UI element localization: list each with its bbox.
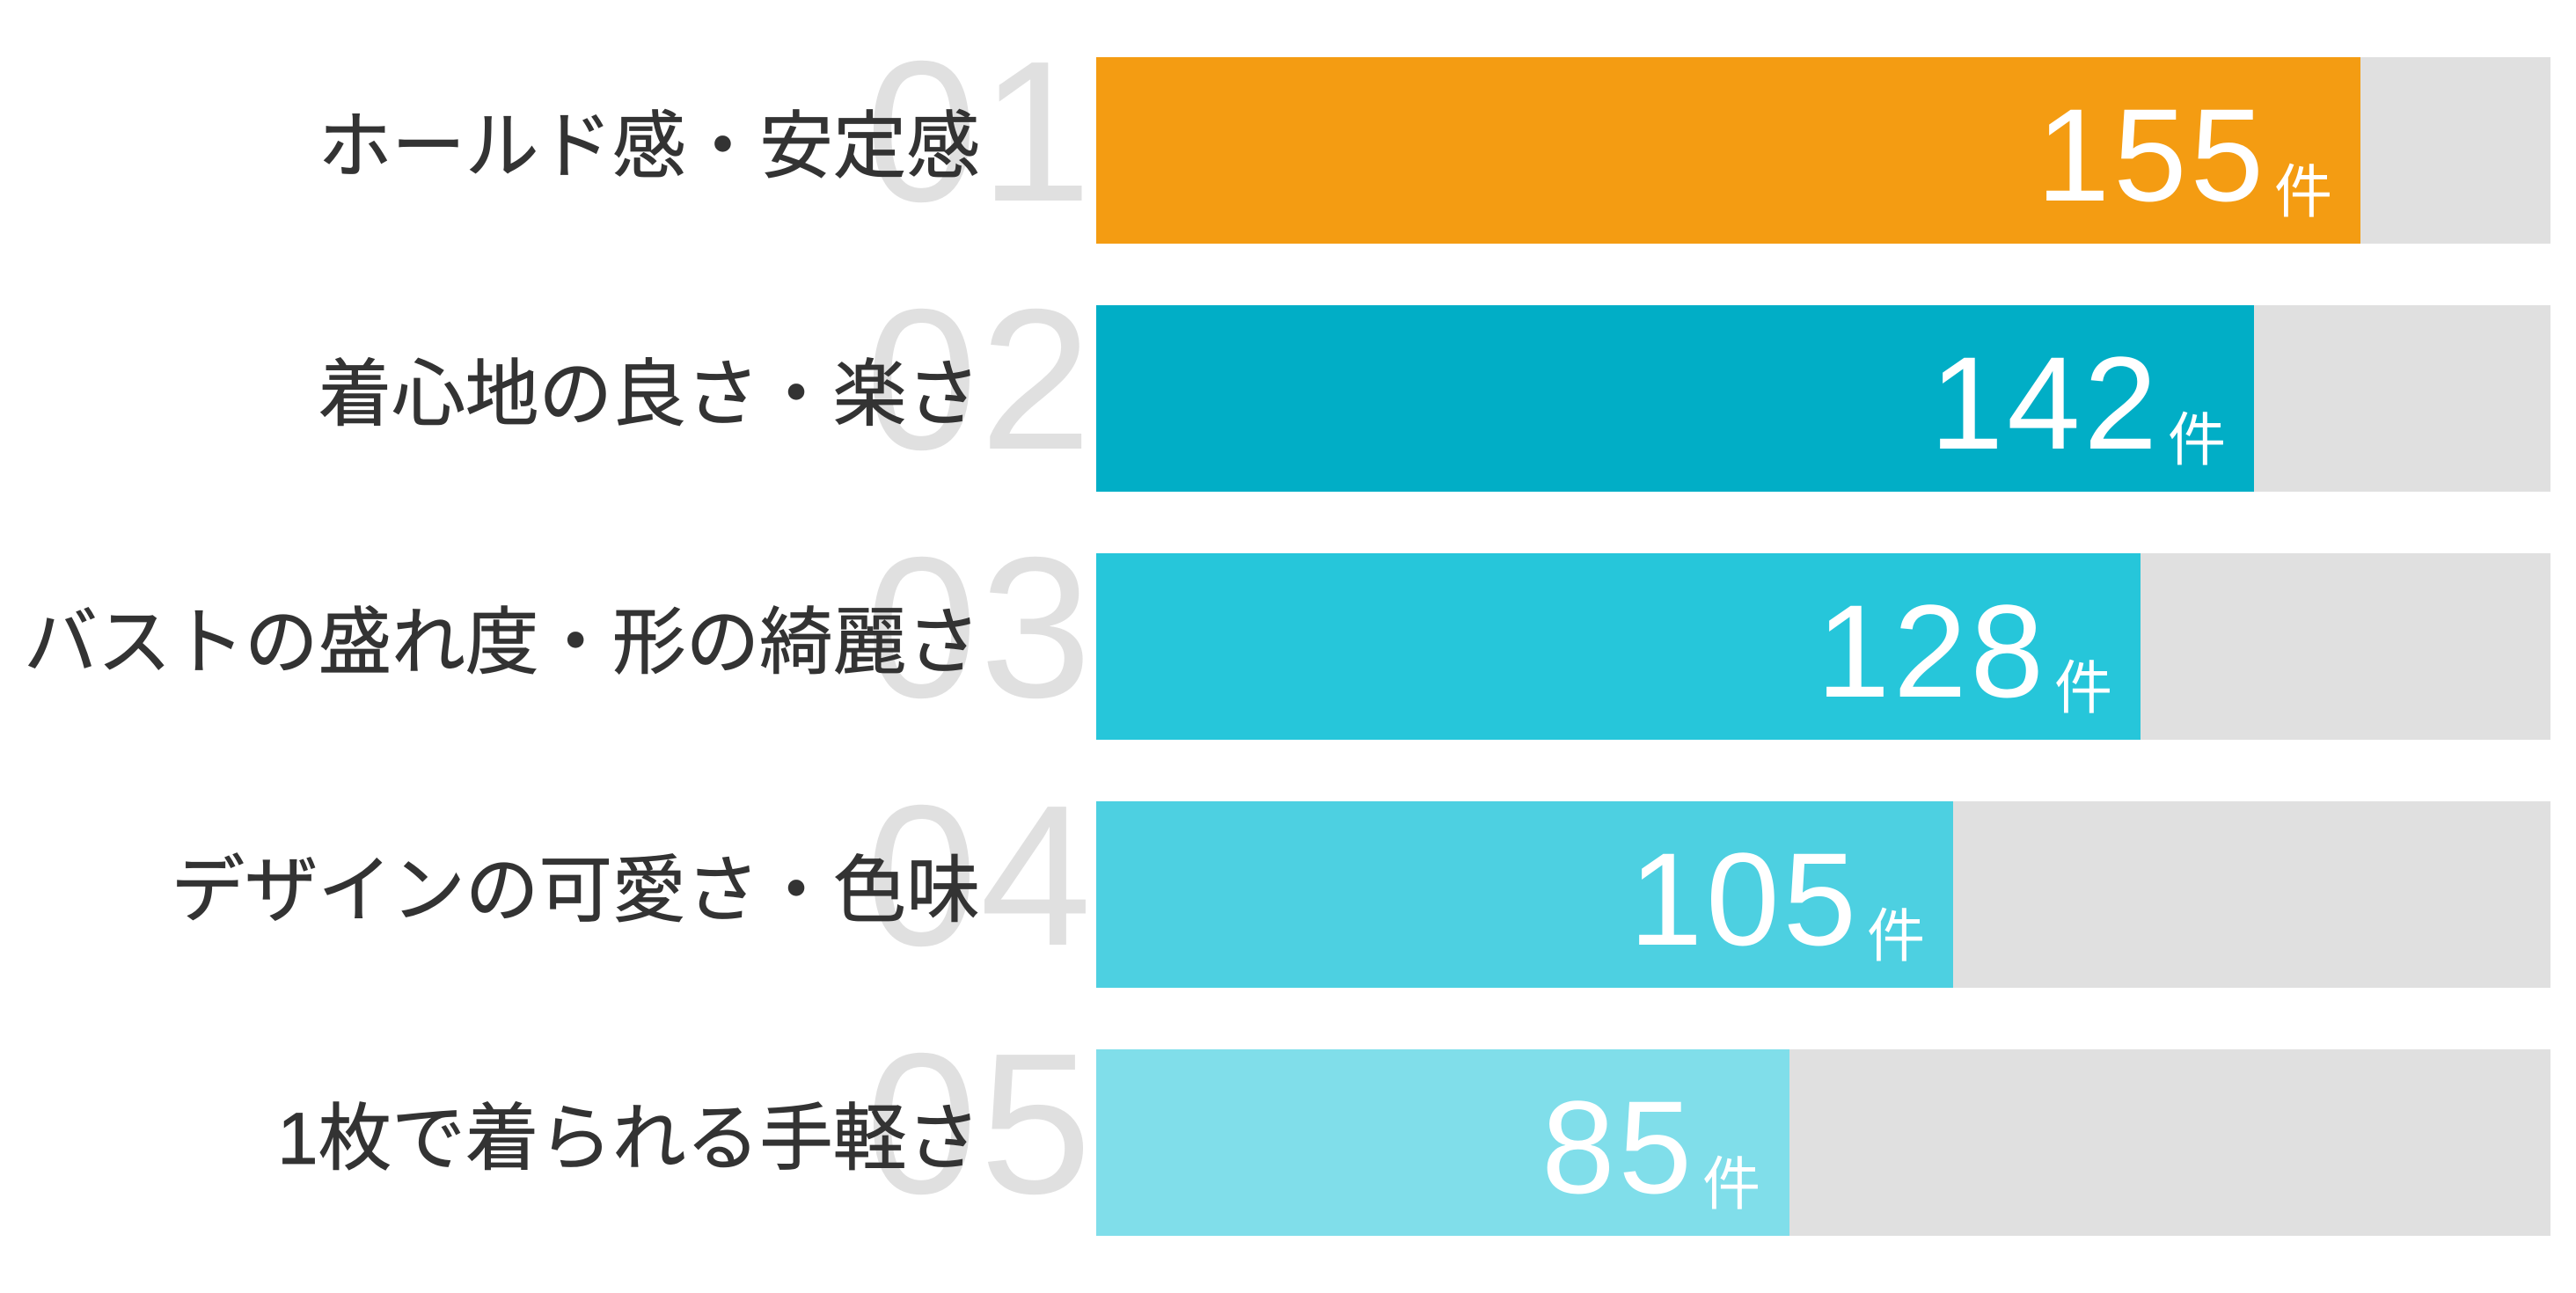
row 1: hold and stability (318, 20, 2550, 244)
rank number 03: 03 (866, 516, 1094, 740)
unit: 件 (2274, 159, 2332, 224)
value 105: 105 (1629, 825, 1860, 973)
bar track 2 (1096, 305, 2550, 492)
value 142: 142 (1930, 329, 2161, 477)
rank number 01: 01 (866, 20, 1094, 244)
unit: 件 (1867, 903, 1925, 968)
bar value 142 (1096, 305, 2254, 492)
row 2: comfort (318, 268, 2550, 492)
rank number 04: 04 (866, 764, 1094, 988)
bar value 85 (1096, 1049, 1789, 1236)
row 5: easy to wear (277, 1012, 2550, 1236)
bar track 1 (1096, 57, 2550, 244)
unit: 件 (2168, 407, 2226, 472)
unit: 件 (2054, 655, 2112, 720)
value 85: 85 (1541, 1073, 1695, 1221)
rank number 05: 05 (866, 1012, 1094, 1236)
label: bust shape: バストの盛れ度・形の綺麗さ (24, 601, 980, 683)
bar track 4 (1096, 801, 2550, 988)
bar value 155 (1096, 57, 2360, 244)
label: comfort: 着心地の良さ・楽さ (318, 353, 980, 435)
bar track 3 (1096, 553, 2550, 740)
value 155: 155 (2037, 81, 2267, 229)
unit: 件 (1702, 1151, 1760, 1216)
row 4: design and colour (171, 764, 2550, 988)
bar value 128 (1096, 553, 2141, 740)
label: easy to wear: 1枚で着られる手軽さ (277, 1097, 980, 1180)
label: design and colour: デザインの可愛さ・色味 (171, 849, 980, 931)
rank number 02: 02 (866, 268, 1094, 492)
bar track 5 (1096, 1049, 2550, 1236)
label: hold and stability: ホールド感・安定感 (318, 105, 980, 187)
bar value 105 (1096, 801, 1953, 988)
row 3: bust shape (24, 516, 2550, 740)
value 128: 128 (1817, 577, 2047, 725)
